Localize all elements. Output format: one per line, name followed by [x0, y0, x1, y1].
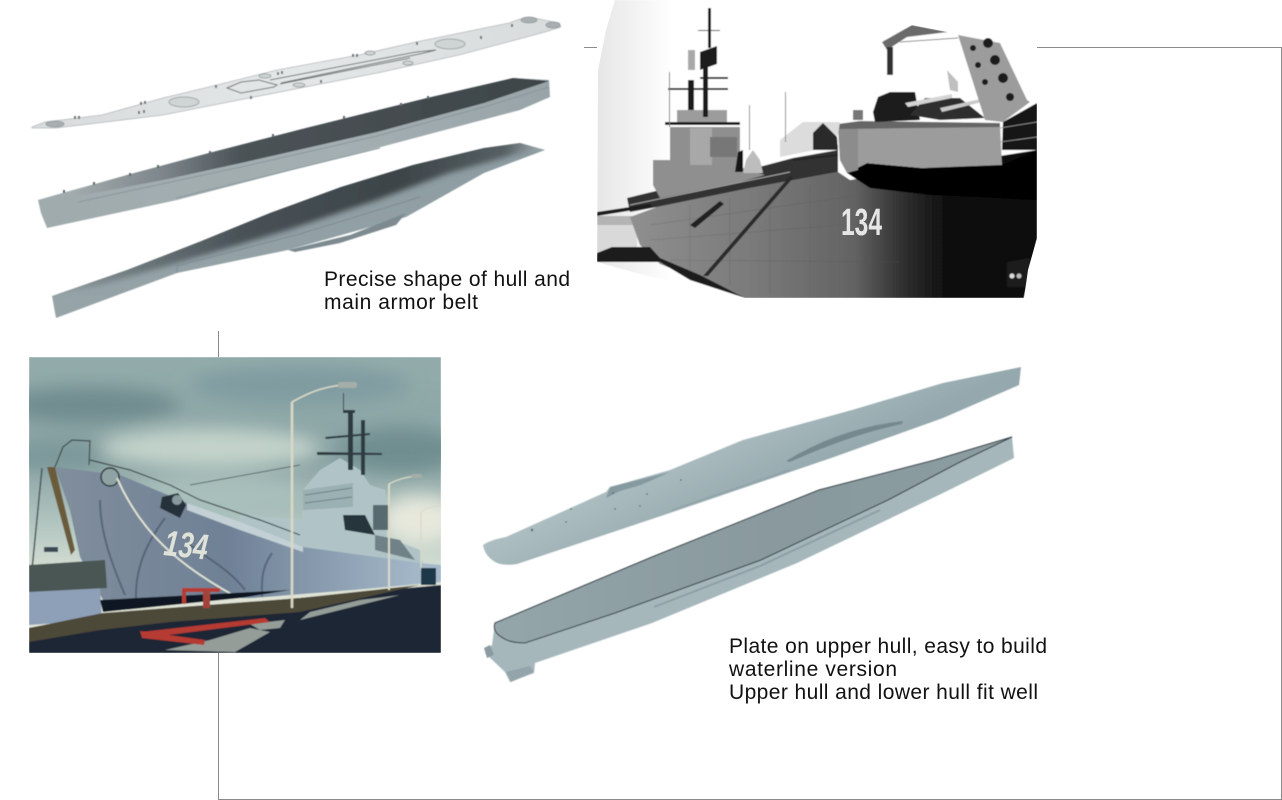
caption: hull shape: Precise shape of hull and [324, 268, 570, 291]
caption: upper and lower hull: Upper hull and lower hull fit well [729, 681, 1038, 704]
hull part: lower hull with armor belt [40, 135, 550, 318]
pier ground [29, 585, 441, 653]
caption: hull shape [324, 268, 570, 314]
hull part: main deck [32, 17, 561, 128]
lamp posts [292, 384, 441, 608]
masts [317, 393, 382, 475]
hull streaks [100, 500, 272, 600]
hull [55, 467, 441, 600]
caption: upper and lower hull: waterline version [728, 658, 897, 681]
portable cabin [421, 568, 436, 585]
caption: upper and lower hull [728, 635, 1047, 704]
bulge [288, 213, 406, 252]
mooring rope [117, 478, 246, 602]
red bollard pipes [140, 588, 270, 645]
flare shadow [847, 150, 1037, 200]
sky [597, 0, 1037, 298]
hull number: 134 [841, 202, 882, 244]
superstructure [653, 127, 765, 198]
caption: hull shape: main armor belt [324, 291, 478, 314]
frame connector lines [218, 48, 1282, 800]
sky [29, 357, 441, 653]
hull rim pegs [63, 96, 429, 193]
hull part: upper hull underside [483, 367, 1021, 565]
gun mount and radar [873, 92, 920, 122]
mast [665, 8, 786, 150]
hull part: upper hull interior [38, 78, 550, 228]
deck outline detail [227, 50, 436, 93]
crane lattice [958, 35, 1030, 122]
hull part: lower hull with plate [484, 437, 1014, 682]
photo: black and white ship in dock [597, 0, 1037, 298]
hull number: 134 [162, 522, 210, 568]
long boom [597, 204, 652, 216]
front ship at left [29, 587, 102, 625]
car [1007, 258, 1030, 287]
waterline plate [494, 437, 1012, 643]
caption: upper and lower hull: Plate on upper hull, easy to build [729, 635, 1047, 658]
photo: colour museum ship at pier [29, 357, 441, 653]
hull with shaded bow [630, 150, 1037, 298]
small holes [531, 479, 682, 531]
water [598, 224, 638, 252]
forecastle block [857, 126, 1003, 169]
clouds [0, 367, 460, 545]
tarpaulin [780, 122, 840, 157]
anchor hawse [101, 468, 119, 486]
superstructure [240, 458, 424, 570]
mooring boat [597, 247, 745, 298]
aft bulge [786, 421, 903, 462]
deck band and rails [627, 150, 838, 212]
deck pegs [74, 24, 513, 119]
bow ladder and rails [47, 467, 75, 555]
crane arm [882, 25, 948, 50]
turret barbettes [46, 17, 560, 127]
forward bulge [606, 472, 670, 498]
